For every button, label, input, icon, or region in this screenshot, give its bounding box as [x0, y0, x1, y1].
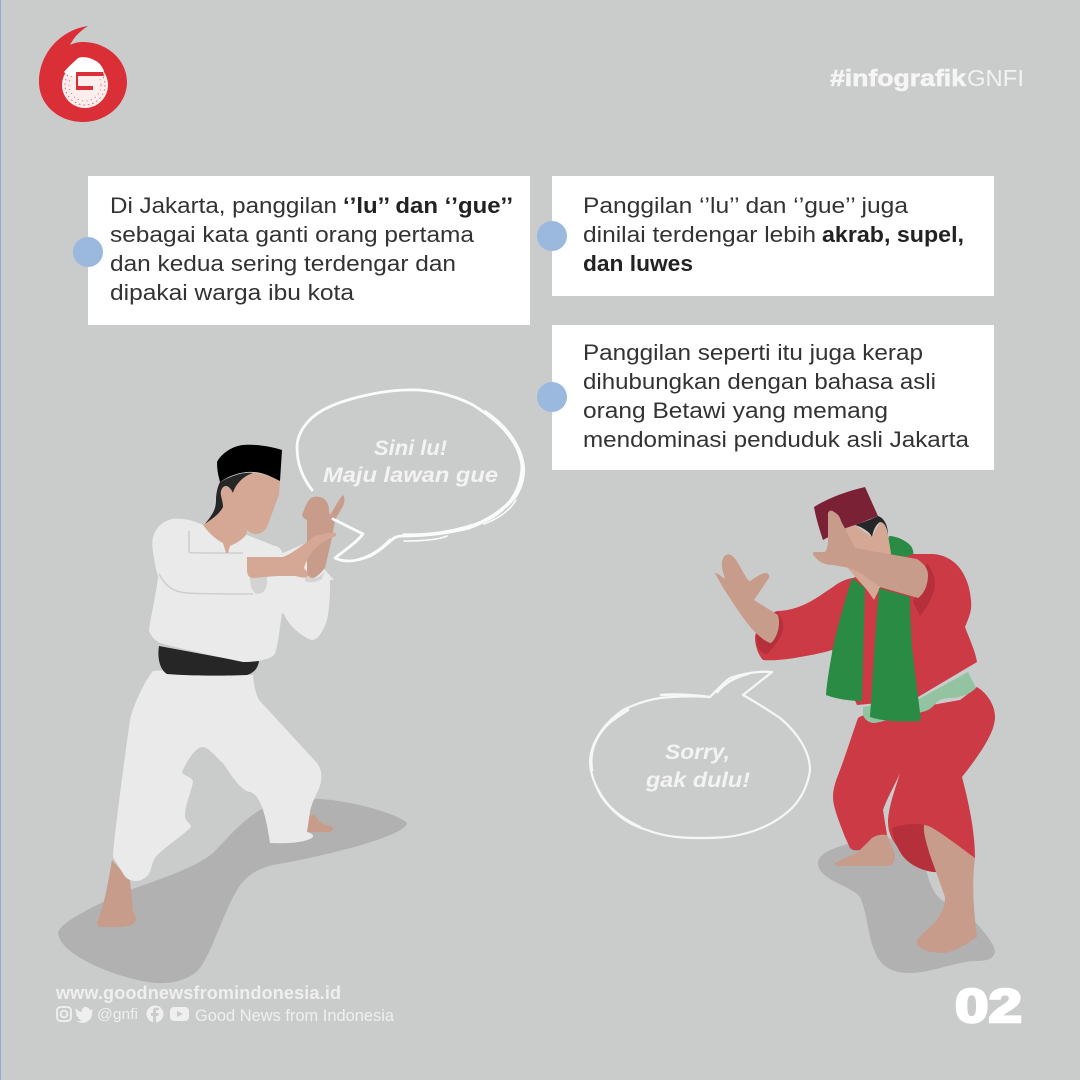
shadow: right figure — [818, 837, 995, 973]
panel: akrab, supel, luwes — [552, 176, 994, 296]
green scarf left strip — [826, 578, 865, 701]
light green sash — [863, 672, 976, 723]
panel: lu dan gue di Jakarta: dan kedua sering terdengar dan — [110, 251, 456, 276]
back foot — [97, 860, 136, 927]
speech bubble text: Sini lu: Sini lu! — [374, 436, 447, 460]
panel: akrab, supel, luwes: Panggilan ‘’lu’’ dan ‘’gue’’ juga — [583, 193, 909, 218]
panel: lu dan gue di Jakarta: dipakai warga ibu kota — [110, 280, 355, 305]
speech bubble text: Sini lu: Maju lawan gue — [323, 463, 498, 487]
panel: akrab, supel, luwes: akrab, supel, — [822, 222, 964, 247]
left arm and hand — [715, 554, 779, 643]
back scarf — [885, 536, 913, 560]
white shirt — [149, 519, 334, 662]
white trousers — [113, 671, 321, 881]
figure: pencak silat fighter in white — [97, 445, 344, 927]
hashtag: #infografik — [830, 65, 966, 91]
speech bubble: fighter in red — [590, 672, 810, 838]
collar and fold lines — [159, 531, 253, 594]
speech bubble text: Sorry — [645, 740, 750, 792]
footer: website and social: @gnfi — [97, 1006, 138, 1023]
panel: lu dan gue di Jakarta: sebagai kata ganti orang pertama — [110, 222, 475, 247]
fez cap — [814, 487, 878, 540]
dark trouser lining — [892, 824, 937, 872]
footer: website and social — [55, 983, 395, 1025]
peci cap — [217, 445, 282, 482]
panel: lu dan gue di Jakarta: Di Jakarta, panggilan — [110, 193, 337, 218]
panel: lu dan gue di Jakarta: ‘’lu’’ dan ‘’gue’’ — [343, 193, 513, 218]
raised arm and hand — [813, 511, 928, 598]
shadow: left figure — [58, 799, 407, 983]
panel: bahasa asli Betawi: Panggilan seperti itu juga kerap — [583, 340, 923, 365]
speech bubble text: Sorry: gak dulu! — [645, 768, 750, 792]
left foot — [835, 834, 895, 866]
front foot — [306, 815, 333, 834]
neck and face — [203, 473, 280, 553]
panel: bahasa asli Betawi: dihubungkan dengan bahasa asli — [583, 369, 936, 394]
panel: akrab, supel, luwes: dan luwes — [583, 251, 693, 276]
panel: lu dan gue di Jakarta — [88, 176, 530, 325]
bullet dot 1 — [73, 237, 103, 267]
logo: GNFI red emblem — [39, 26, 127, 122]
icon: twitter — [76, 1007, 93, 1023]
red jacket — [755, 554, 977, 705]
front arm — [247, 533, 336, 578]
panel: akrab, supel, luwes: dinilai terdengar lebih — [583, 222, 816, 247]
icon: facebook — [146, 1006, 164, 1023]
hair — [205, 473, 253, 524]
back hand — [302, 495, 344, 578]
figure: Betawi fighter in red — [715, 487, 995, 953]
bullet dot 2 — [537, 221, 567, 251]
cuff shade — [250, 577, 267, 594]
hashtag — [830, 65, 1024, 91]
page number: 02 — [955, 979, 1022, 1032]
hashtag: GNFI — [967, 65, 1024, 91]
right leg — [917, 825, 977, 953]
face — [843, 522, 891, 600]
footer: website and social: www.goodnewsfromindonesia.id — [55, 983, 341, 1003]
footer: website and social: Good News from Indonesia — [195, 1006, 395, 1025]
green scarf right strip — [870, 588, 921, 722]
dark cuffs — [756, 612, 783, 654]
panel: bahasa asli Betawi: mendominasi penduduk asli Jakarta — [583, 427, 970, 452]
speech bubble text: Sorry: Sorry, — [665, 740, 730, 764]
black belt — [158, 646, 259, 676]
hair — [855, 516, 888, 537]
red trousers — [833, 687, 995, 872]
icon: youtube — [170, 1007, 189, 1021]
icon: instagram — [57, 1007, 71, 1021]
bullet dot 3 — [537, 382, 567, 412]
speech bubble text: Sini lu — [323, 436, 498, 487]
panel: bahasa asli Betawi: orang Betawi yang memang — [583, 398, 888, 423]
speech bubble: fighter in white — [297, 390, 523, 561]
panel: bahasa asli Betawi — [552, 325, 994, 470]
